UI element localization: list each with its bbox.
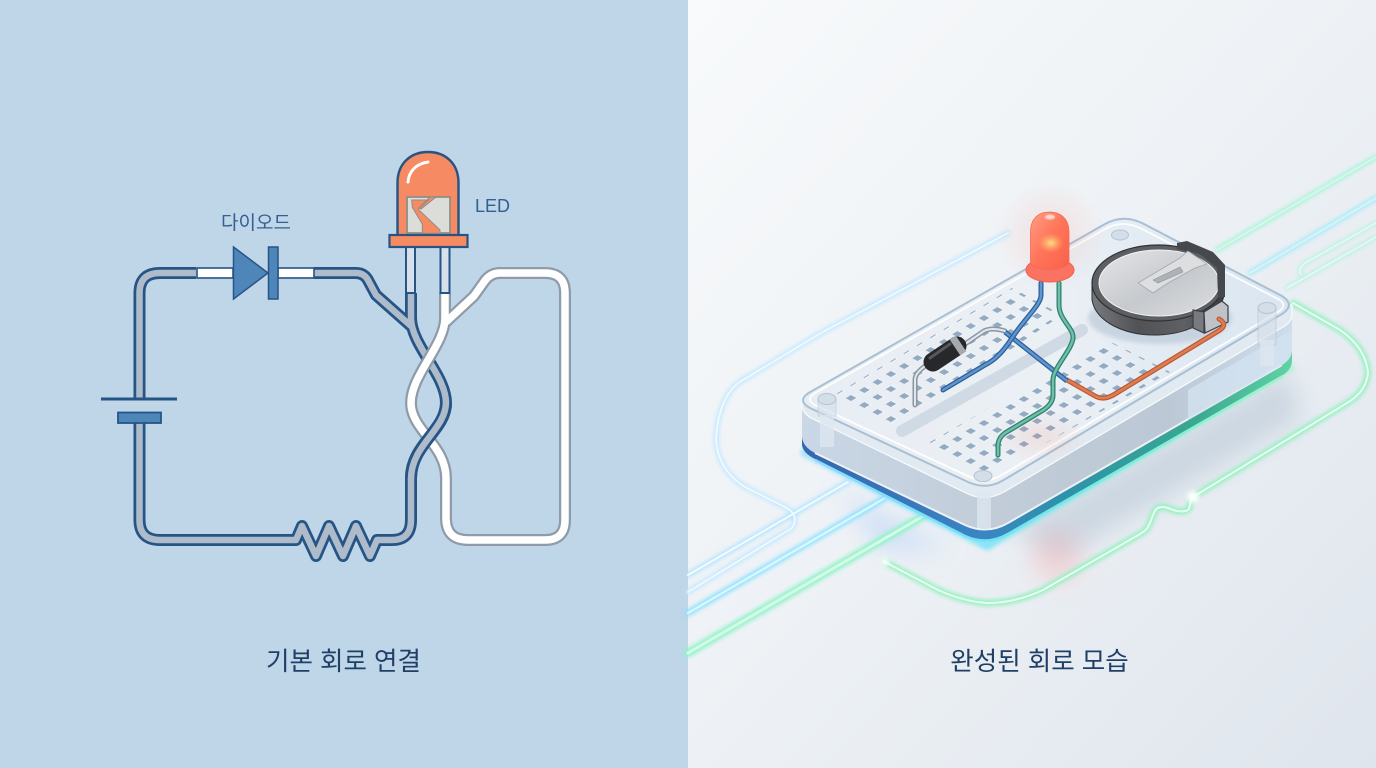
diode component [930,344,961,362]
board bright bottom edge [815,376,1283,541]
side wall lower highlight [815,365,1282,530]
wire: white segments beside the diode [197,268,314,278]
coin cell battery [1088,241,1232,344]
glow halo [688,157,1376,653]
wire: blue jumper two [943,283,1041,390]
LED dome [1030,212,1069,270]
illustration: breadboard [802,180,1292,545]
LED legs [406,247,450,293]
illustration: glowing trace lines [688,157,1376,653]
board top face [803,219,1289,486]
panel: finished circuit background [688,0,1376,768]
holder side [1092,283,1224,335]
icon: LED [390,152,468,293]
board rim highlight [810,224,1284,480]
top plate edge [802,305,1292,498]
panel: basic circuit background [0,0,688,768]
side wall clear right section [1188,330,1292,420]
wire: blue jumper one [1005,332,1067,381]
title: finished circuit: 완성된 회로 모습 [950,648,1129,676]
label: diode: 다이오드 [221,212,291,234]
spring clip [1138,251,1207,293]
board clear side wall [802,305,1292,530]
holder clip top [1177,241,1225,298]
LED top highlight [1045,214,1055,220]
wire: grey over white at lower crossing [411,402,446,479]
wire: orange jumper [1067,319,1224,398]
illustration: soft board shadows [840,370,1300,583]
label: LED: LED [475,196,510,216]
LED inner element [407,197,450,233]
LED collar [1026,258,1074,282]
red glow on board [992,411,1088,463]
holder rim [1092,245,1224,321]
breadboard centre channel [902,330,1082,431]
LED dome [398,152,458,236]
side wall posts [820,340,1274,528]
LED base [390,235,468,247]
title: basic circuit connection: 기본 회로 연결 [266,648,421,676]
red LED [995,180,1105,290]
wire: white return loop [411,273,565,540]
wire: grey circuit wire [140,273,446,556]
LED highlight [408,162,428,182]
diagram: basic circuit schematic [101,152,565,556]
battery soft shadow [1088,292,1232,344]
board base glow [802,365,1292,545]
corner posts [818,230,1276,482]
wire: grey diode leads [915,329,1005,405]
breadboard upper hole block [836,288,1062,428]
LED halo [995,180,1105,290]
trace spark points [881,491,1199,566]
board base coloured strip [802,340,1292,540]
breadboard lower hole block [925,340,1170,478]
holder contact [1193,301,1228,333]
LED hot core [1038,233,1064,253]
LED inner anode shape [412,197,440,233]
wire: green jumper [998,283,1073,455]
icon: diode symbol [234,247,278,299]
trace core lines [688,157,1376,653]
icon: battery symbol [101,398,177,423]
coin cell face [1099,250,1219,316]
